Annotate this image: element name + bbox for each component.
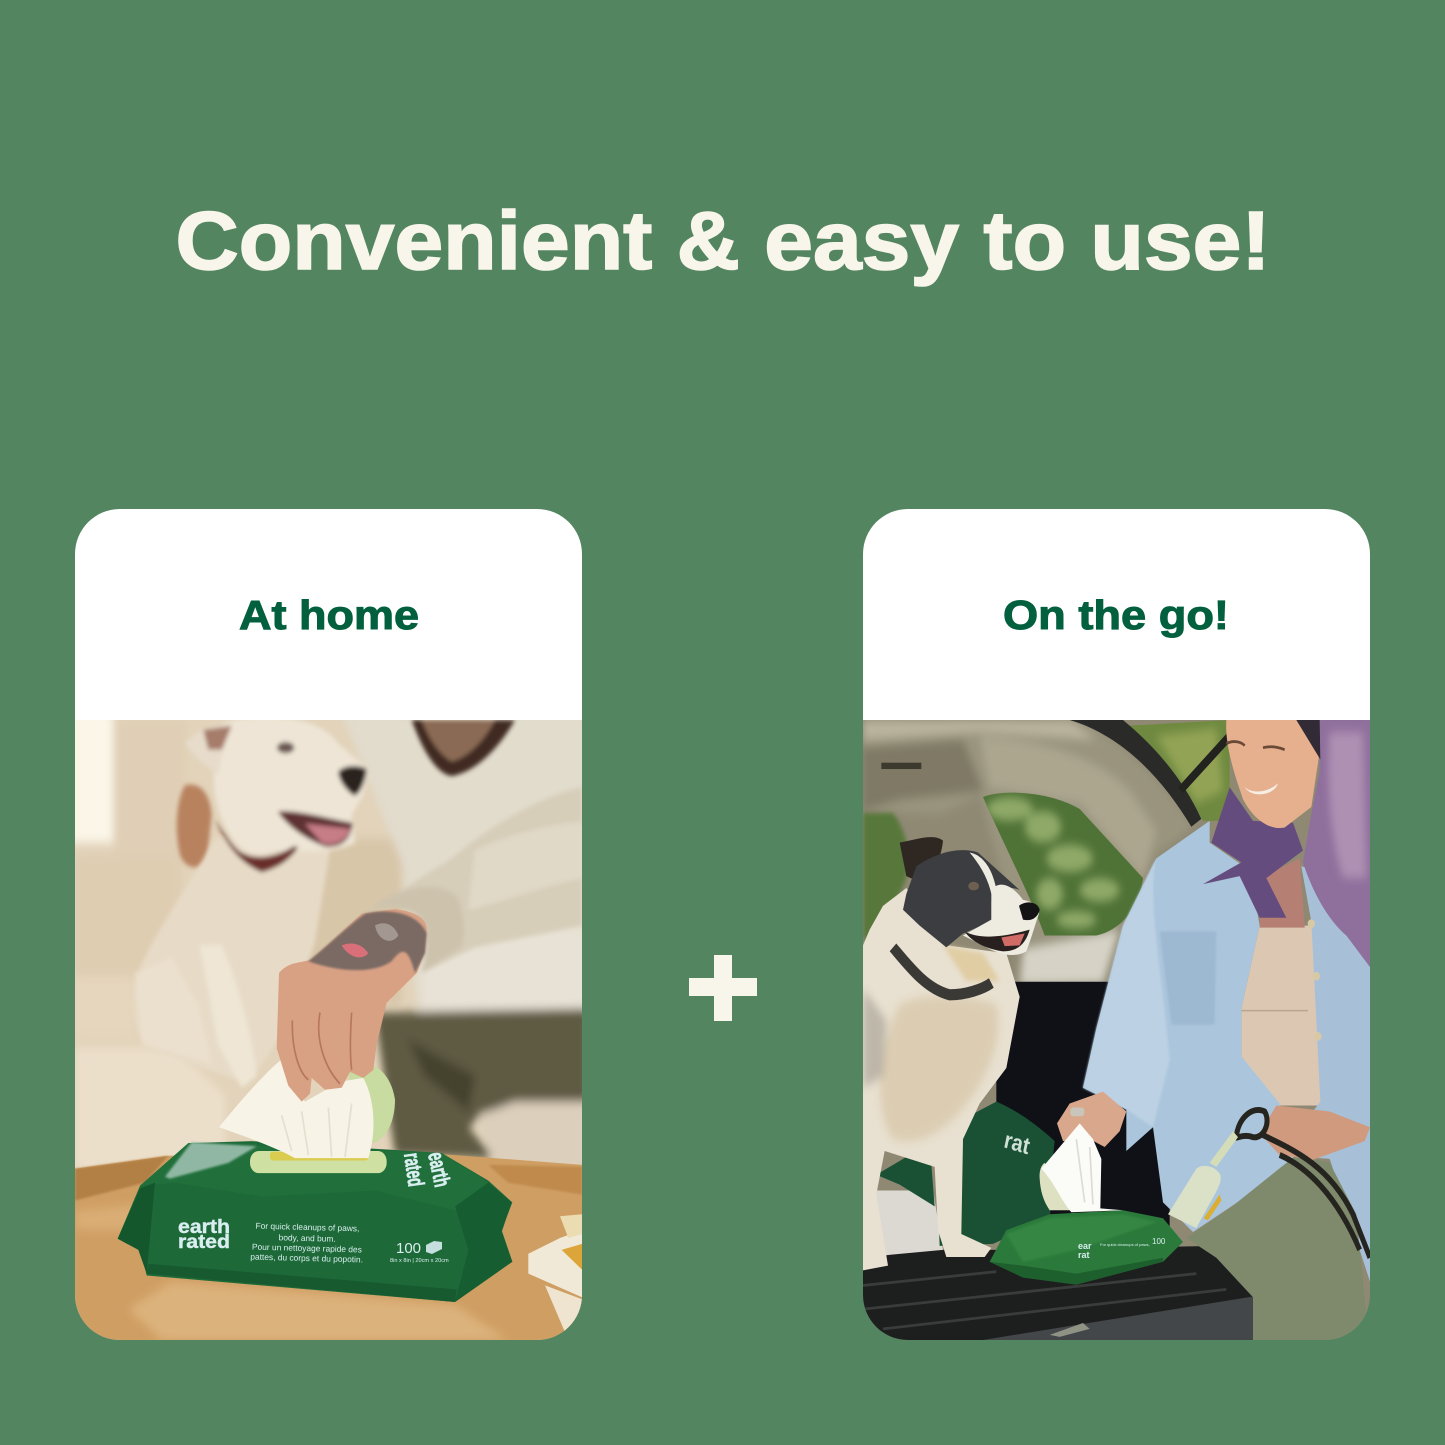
man arm behind dog <box>177 785 212 867</box>
card background: at home <box>75 509 582 720</box>
lid and wipe <box>219 1059 395 1173</box>
chest <box>1260 858 1305 928</box>
pack text: pattes, du corps et du popotin. <box>250 1252 363 1264</box>
top <box>1241 926 1330 1106</box>
small pack text: rat <box>1078 1250 1090 1260</box>
pack text: earth <box>178 1217 230 1238</box>
denim shirt right <box>1301 866 1370 1282</box>
blanket: rat <box>1002 1126 1033 1160</box>
car interior <box>863 720 1193 985</box>
cargo well <box>996 982 1170 1227</box>
tailgate floor <box>863 1246 1256 1340</box>
pack text: rated <box>178 1232 230 1253</box>
pack text: 100 <box>396 1240 421 1257</box>
blurred room background <box>68 712 588 1171</box>
icon: plus <box>689 955 757 1021</box>
sleeve <box>368 787 582 973</box>
heading: at home: At home <box>239 592 419 638</box>
panel: on the go <box>863 509 1370 1340</box>
pack text: Pour un nettoyage rapide des <box>252 1242 362 1254</box>
card background: on the go <box>863 509 1370 720</box>
title: Convenient & easy to use! <box>176 194 1270 287</box>
dog <box>134 717 368 1088</box>
heading: on the go: On the go! <box>1003 592 1229 638</box>
small wipes pack <box>990 1210 1183 1285</box>
pack text: earth <box>422 1150 454 1189</box>
face <box>1226 720 1320 828</box>
panel: at home <box>68 509 588 1340</box>
upper right foliage and hatch <box>1070 720 1230 827</box>
small pack text: ear <box>1078 1241 1092 1251</box>
pack text: For quick cleanups of paws, <box>255 1221 359 1233</box>
hand and tattooed wrist <box>277 909 427 1102</box>
pack text: rated <box>398 1151 428 1188</box>
stacked books <box>528 1230 582 1297</box>
table <box>75 1149 582 1340</box>
wipes pack <box>118 1141 512 1302</box>
blanket <box>863 1102 1055 1256</box>
left hand <box>1057 1092 1126 1147</box>
leash <box>1236 1110 1370 1258</box>
small pack text: 100 <box>1152 1237 1166 1246</box>
headliner vent <box>881 763 921 769</box>
car window foliage <box>863 793 1143 941</box>
dog <box>863 837 1040 1270</box>
right hand <box>1260 1106 1370 1160</box>
small pack text <box>1078 1238 1165 1258</box>
lid and pulled wipe <box>1040 1123 1123 1212</box>
pack text <box>178 1150 454 1264</box>
hair <box>1300 720 1370 967</box>
trousers <box>1186 1155 1366 1340</box>
woman <box>1057 720 1370 1340</box>
denim shirt left <box>1083 821 1296 1232</box>
photo: woman and dog at car boot <box>863 720 1370 1340</box>
pack text: 8in x 8in | 20cm x 20cm <box>390 1258 449 1264</box>
bag holder <box>1168 1131 1238 1228</box>
pack text: body, and bum. <box>278 1232 336 1244</box>
photo: man reaching for wipes with dog <box>68 712 588 1340</box>
man face and beard <box>412 720 515 776</box>
small pack text: For quick cleanups of paws, <box>1100 1242 1150 1247</box>
